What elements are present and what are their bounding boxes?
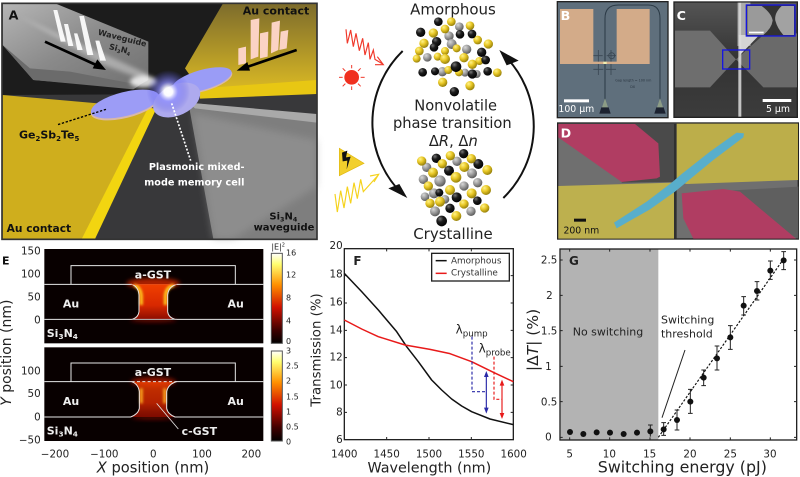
top field map: Au	[228, 298, 244, 311]
colorbar tick labels: 1.5	[286, 392, 299, 401]
blue GST strip	[614, 133, 744, 228]
probe marker	[494, 357, 504, 419]
E y tick labels: 50	[28, 388, 41, 400]
label: Au contact top: Au contact	[243, 4, 309, 17]
label: Ge2Sb2Te5: Te	[61, 129, 74, 142]
icon: yellow light wave	[335, 174, 379, 212]
E y tick labels: 100	[21, 269, 41, 281]
scale bar C	[763, 99, 791, 102]
label: Si3N4 waveguide: Si	[269, 211, 280, 222]
E y tick labels: 50	[28, 291, 41, 303]
pink spectrum bars	[238, 18, 288, 65]
label: Ge2Sb2Te5: Sb	[40, 129, 56, 142]
label: no switching: No switching	[573, 326, 643, 339]
panel letter D: D	[561, 126, 571, 141]
E x axis title: X position (nm)	[96, 460, 209, 477]
legend: Crystalline	[451, 269, 498, 279]
colorbar tick labels: 8	[286, 293, 291, 302]
arrow: into contact	[237, 50, 297, 71]
panel letter F: F	[353, 254, 362, 268]
G x tick labels: 5	[566, 449, 573, 461]
label: waveguide: Waveguide	[97, 28, 148, 49]
label: Ge2Sb2Te5: 5	[74, 135, 79, 143]
label: lambda probe: probe	[486, 348, 511, 358]
colorbar tick labels: 2.5	[286, 361, 299, 370]
bottom field map: 4	[73, 429, 78, 438]
G x tick labels: 15	[643, 449, 656, 461]
label: waveguide: Si	[108, 42, 119, 53]
white spectrum bars	[53, 10, 106, 61]
G y tick labels: 2.5	[541, 255, 557, 267]
icon: red light wave	[346, 29, 383, 65]
shaded area	[622, 124, 674, 183]
label: switching threshold	[661, 314, 714, 340]
F x tick labels: 1450	[374, 449, 400, 461]
legend	[432, 253, 509, 281]
label: memory cell: mode memory cell	[144, 178, 244, 189]
fit line	[658, 262, 782, 437]
panel letter G: G	[569, 254, 579, 268]
label: lambda pump: λ	[456, 322, 463, 336]
label: Ge2Sb2Te5: 2	[35, 135, 40, 143]
label: lambda pump: pump	[463, 329, 488, 339]
F x tick labels: 1600	[501, 449, 527, 461]
Au contact bottom left	[3, 95, 155, 239]
label: Si3N4 waveguide: 3	[280, 216, 284, 223]
G y tick labels: 1.5	[541, 325, 557, 337]
hot spot glow	[147, 70, 190, 113]
ticks	[560, 249, 797, 440]
cycle arrow: left	[372, 51, 407, 198]
F y tick labels: 18	[330, 268, 343, 280]
E x tick labels: −100	[90, 448, 119, 460]
Si3N4 waveguide top left	[3, 4, 157, 89]
colorbar tick labels: 4	[286, 316, 291, 325]
error bars	[648, 252, 786, 437]
colorbar title: 2	[282, 242, 285, 248]
colorbar tick labels: 2	[286, 376, 291, 385]
yellow electrode bottom left	[558, 183, 674, 239]
data points	[567, 257, 787, 437]
label: Si3N4 waveguide: waveguide	[254, 222, 315, 233]
label: Au contact bottom: Au contact	[7, 222, 71, 235]
yellow electrode top right	[677, 124, 798, 184]
threshold pointer	[662, 350, 685, 418]
scale label B: 100 µm	[558, 104, 594, 115]
bottom field map: Au	[228, 395, 244, 408]
G y tick labels: 0.5	[541, 396, 557, 408]
F y axis title: Transmission (%)	[310, 293, 325, 408]
left pad	[675, 31, 736, 87]
F y tick labels: 8	[336, 407, 343, 419]
G x tick labels: 30	[763, 449, 777, 461]
colorbar tick labels: 0	[286, 337, 291, 346]
E y tick labels: 0	[34, 412, 41, 424]
selection box	[723, 50, 750, 69]
Ge2Sb2Te5 film	[88, 62, 235, 126]
curve: amorphous	[344, 273, 513, 425]
bottom field map: a-GST	[135, 366, 172, 379]
top field map: Au	[63, 298, 79, 311]
alignment crosses	[593, 50, 616, 75]
panel E: field simulation	[0, 242, 299, 477]
F x tick labels	[331, 449, 527, 461]
icon: voltage warning	[339, 148, 364, 176]
colorbar tick labels: 16	[286, 248, 296, 257]
scale bar D	[574, 219, 586, 222]
panel letter C: C	[677, 8, 686, 23]
colorbar tick labels: 3	[286, 346, 291, 355]
E y tick labels: 0	[34, 315, 41, 327]
waveguide loop	[605, 5, 660, 100]
G x tick labels: 20	[683, 449, 697, 461]
panel letter B: B	[561, 8, 570, 23]
panel B: optical micrograph	[557, 2, 668, 118]
label: waveguide	[97, 28, 148, 58]
panel C: SEM overview	[674, 2, 797, 117]
curve: crystalline	[344, 320, 513, 382]
cycle arrow: right	[499, 50, 534, 198]
label: switching threshold: threshold	[661, 327, 713, 340]
memory cell leader line	[172, 103, 191, 161]
panel D: false colour SEM	[558, 123, 798, 239]
bottom field map	[44, 347, 263, 441]
scale bar B	[564, 99, 589, 102]
label: lambda probe: λ	[479, 341, 486, 355]
G x tick labels: 10	[603, 449, 616, 461]
red electrode top left	[558, 124, 660, 182]
panel F: transmission chart	[310, 240, 527, 476]
label: Si3N4 waveguide	[254, 211, 315, 233]
F x axis title: Wavelength (nm)	[367, 460, 491, 476]
E x tick labels: 0	[150, 448, 157, 460]
F y tick labels: 16	[330, 296, 343, 308]
E x tick labels: −200	[41, 448, 69, 460]
gold electrodes	[560, 9, 650, 64]
F y tick labels: 6	[336, 434, 343, 446]
bottom field map: Si	[47, 424, 58, 437]
atoms: amorphous	[413, 17, 502, 96]
E x tick labels: 200	[241, 448, 261, 460]
atoms: crystalline	[417, 149, 492, 226]
panel A: device schematic	[2, 3, 317, 239]
label: phase transition: Nonvolatile	[414, 98, 497, 115]
icon: sun	[339, 65, 365, 90]
no switching region	[561, 249, 658, 440]
label: Si3N4 waveguide: N	[284, 211, 293, 222]
bottom field map: N	[64, 424, 73, 437]
E x tick labels	[41, 448, 261, 460]
F x tick labels: 1500	[416, 449, 442, 461]
plot frame	[560, 249, 797, 440]
device label: Gap length = 100 nm	[615, 79, 651, 83]
panel letter A: A	[9, 7, 19, 22]
G y tick labels	[541, 255, 557, 444]
label: memory cell: Plasmonic mixed-	[149, 162, 245, 173]
panel letter E: E	[2, 255, 10, 268]
label: Ge2Sb2Te5: Ge	[19, 129, 35, 142]
top field map: N	[64, 327, 73, 340]
scale label C: 5 µm	[766, 104, 790, 115]
colorbar tick labels	[286, 248, 299, 446]
grating couplers	[599, 98, 666, 114]
label: waveguide: 4	[126, 51, 131, 58]
device label: DX	[630, 85, 636, 89]
scale label D: 200 nm	[563, 225, 599, 236]
E y tick labels: 150	[21, 245, 41, 257]
label: Crystalline: Crystalline	[413, 225, 493, 243]
top field map: 3	[58, 332, 64, 341]
bottom field map: Au	[63, 395, 79, 408]
colorbar tick labels: 1	[286, 407, 291, 416]
panel A frame	[2, 3, 317, 239]
bottom field map: c-GST	[182, 425, 218, 438]
label: Si3N4 waveguide: 4	[293, 216, 298, 223]
ticks	[344, 249, 513, 440]
label: waveguide: N	[120, 45, 128, 55]
panel G: switching energy chart	[541, 249, 797, 476]
F x tick labels: 1400	[331, 449, 357, 461]
E y tick labels: 100	[21, 365, 41, 377]
panel: phase transition cycle	[335, 1, 534, 243]
GST leader line	[57, 109, 106, 125]
label: phase transition: phase transition	[393, 115, 512, 132]
F x tick labels: 1550	[458, 449, 484, 461]
E y tick labels	[19, 245, 41, 446]
colorbar title: |E|	[271, 243, 282, 252]
device label	[615, 79, 651, 89]
inset	[746, 5, 795, 36]
F y tick labels: 14	[330, 324, 343, 336]
label: switching threshold: Switching	[661, 314, 714, 327]
G x tick labels	[566, 449, 777, 461]
label: waveguide: 3	[116, 49, 121, 56]
right pad	[736, 33, 797, 87]
label: Ge2Sb2Te5: 2	[56, 135, 61, 143]
colorbar bottom	[271, 351, 282, 441]
F y tick labels: 20	[330, 240, 343, 252]
colorbar tick labels: 12	[286, 271, 296, 280]
top field map	[44, 249, 263, 343]
G y tick labels: 1	[545, 361, 552, 373]
bottom field map: 3	[58, 429, 64, 438]
label: phase transition	[393, 98, 512, 150]
Au contact top right	[185, 4, 317, 89]
Au contact top right edge	[200, 80, 317, 99]
vertical waveguide	[737, 3, 759, 117]
G y tick labels: 0	[545, 432, 552, 444]
arrow: into waveguide	[45, 42, 106, 70]
colorbar tick labels: 0	[286, 437, 291, 446]
label: Amorphous: Amorphous	[410, 1, 496, 19]
top field map: 4	[73, 332, 78, 341]
G x axis title: Switching energy (pJ)	[598, 457, 767, 476]
F y tick labels: 10	[330, 379, 343, 391]
top field map: Si	[47, 327, 58, 340]
top field map: a-GST	[135, 268, 172, 281]
colorbar tick labels: 0.5	[286, 422, 299, 431]
colorbar top	[271, 253, 282, 343]
G y tick labels: 2	[546, 290, 553, 302]
E y tick labels: −50	[19, 434, 41, 446]
pump marker	[472, 337, 489, 414]
legend: Amorphous	[451, 256, 502, 266]
label: phase transition: ΔR, Δn	[429, 133, 478, 150]
Si3N4 waveguide bottom right	[188, 103, 317, 239]
G x tick labels: 25	[724, 449, 737, 461]
gap highlight	[603, 62, 607, 64]
plot frame	[344, 249, 513, 440]
F y tick labels: 12	[330, 352, 343, 364]
Au contact bottom left edge	[82, 107, 156, 239]
F y tick labels	[330, 240, 343, 446]
label: memory cell	[144, 162, 245, 189]
G y axis label: |ΔT| (%)	[524, 309, 542, 371]
E x tick labels: 100	[192, 448, 212, 460]
red electrode bottom right	[682, 189, 796, 239]
